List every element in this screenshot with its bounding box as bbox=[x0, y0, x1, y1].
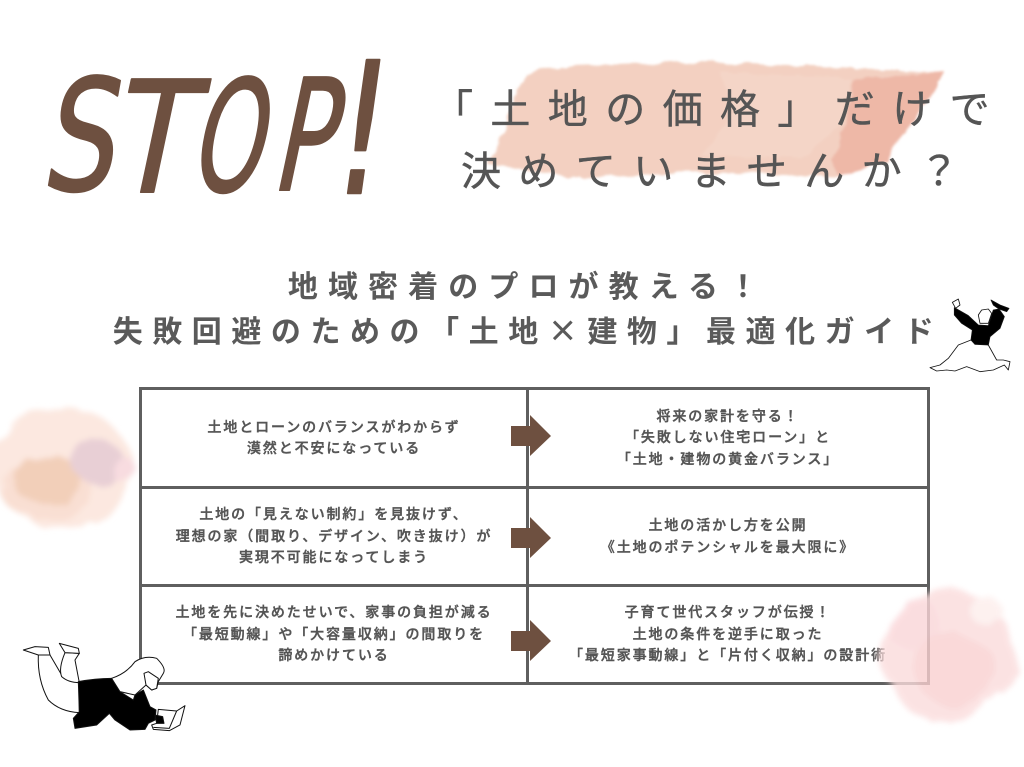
problem 3: 諦めかけている bbox=[278, 647, 390, 663]
illustration: woman lying with laptop bbox=[23, 643, 185, 731]
arrow 1 bbox=[511, 415, 551, 456]
solution 1: 「失敗しない住宅ローン」と bbox=[625, 429, 831, 445]
problem 3: 「最短動線」や「大容量収納」の間取りを bbox=[183, 626, 485, 642]
problem 2: 理想の家（間取り、デザイン、吹き抜け）が bbox=[176, 528, 492, 544]
headline line 2: 決めていませんか？ bbox=[461, 150, 976, 194]
title: STOP!: T bbox=[99, 48, 218, 229]
brush stroke behind headline bbox=[486, 62, 944, 178]
watercolor blob: left bbox=[0, 408, 133, 528]
problem 3: 土地を先に決めたせいで、家事の負担が減る bbox=[175, 604, 493, 620]
title: STOP!: S bbox=[33, 48, 137, 227]
problem 1: 土地とローンのバランスがわからず bbox=[207, 418, 461, 434]
title: STOP! bbox=[33, 23, 405, 236]
problem 3 bbox=[175, 604, 493, 663]
subheading line 1: 地域密着のプロが教える！ bbox=[288, 271, 768, 304]
solution 3 bbox=[569, 604, 887, 663]
solution 2: 《土地のポテンシャルを最大限に》 bbox=[601, 538, 855, 554]
headline line 1: 「土地の価格」だけで bbox=[433, 88, 1007, 132]
problem 1: 漠然と不安になっている bbox=[247, 440, 421, 456]
title: STOP!: ! bbox=[322, 23, 405, 236]
solution 3: 土地の条件を逆手に取った bbox=[633, 626, 823, 642]
comparison table bbox=[139, 387, 930, 685]
illustration: woman jumping bbox=[930, 299, 1010, 372]
solution 2 bbox=[601, 517, 855, 554]
solution 1: 「土地・建物の黄金バランス」 bbox=[617, 451, 839, 467]
solution 3: 「最短家事動線」と「片付く収納」の設計術 bbox=[569, 647, 887, 663]
problem 2 bbox=[176, 506, 492, 565]
subheading line 2: 失敗回避のための「土地×建物」最適化ガイド bbox=[113, 307, 943, 351]
arrow 3 bbox=[511, 620, 551, 661]
solution 1 bbox=[617, 408, 839, 467]
solution 3: 子育て世代スタッフが伝授！ bbox=[625, 604, 831, 620]
solution 2: 土地の活かし方を公開 bbox=[648, 517, 808, 533]
arrow 2 bbox=[511, 517, 551, 558]
problem 2: 実現不可能になってしまう bbox=[239, 549, 429, 565]
problem 1 bbox=[207, 418, 461, 456]
solution 1: 将来の家計を守る！ bbox=[656, 408, 800, 424]
title: STOP!: O bbox=[180, 48, 290, 228]
problem 2: 土地の「見えない制約」を見抜けず、 bbox=[199, 506, 469, 522]
title: STOP!: P bbox=[262, 47, 360, 227]
